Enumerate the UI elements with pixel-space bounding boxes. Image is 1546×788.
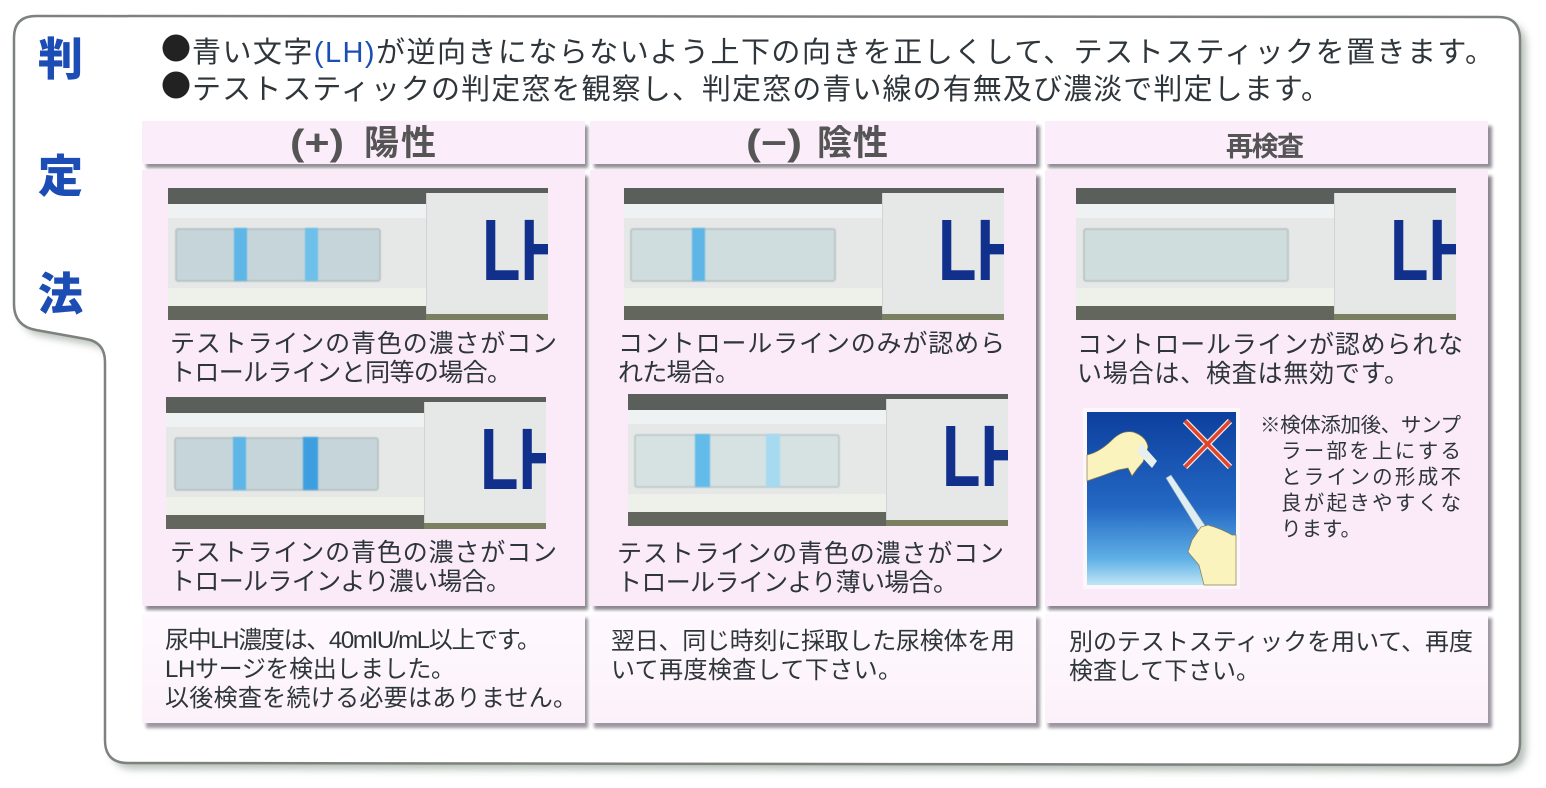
text block: instructions: 青い文字(LH)が逆向きにならないよう上下の向きを正しくして、テストスティックを置きます。 <box>192 36 1494 69</box>
note text: ります。 <box>1281 518 1361 541</box>
caption: positive equal: テストラインの青色の濃さがコン <box>170 330 557 358</box>
strip: no lines: LH <box>1390 202 1474 299</box>
text block: instructions <box>162 34 1494 106</box>
text block: instructions: テストスティックの判定窓を観察し、判定窓の青い線の有無及び濃淡で判定します。 <box>192 73 1330 106</box>
strip: positive darker: LH <box>480 411 564 508</box>
caption: negative lighter: トロールラインより薄い場合。 <box>617 569 958 597</box>
strip: negative control only <box>624 188 1022 320</box>
heading: negative: (−) <box>746 122 802 163</box>
footer text: positive: 以後検査を続ける必要はありません。 <box>165 685 577 712</box>
note text: とラインの形成不 <box>1281 466 1461 489</box>
title: vertical heading: 法 <box>38 269 83 320</box>
note text: 良が起きやすくな <box>1281 492 1461 515</box>
footer text: retest: 検査して下さい。 <box>1069 658 1260 685</box>
caption: invalid <box>1077 331 1463 388</box>
title: vertical heading <box>38 34 83 320</box>
footer text: negative: いて再度検査して下さい。 <box>611 657 902 684</box>
caption: positive darker: テストラインの青色の濃さがコン <box>170 539 557 567</box>
heading: negative: 陰性 <box>817 124 888 163</box>
footer text: retest: 別のテストスティックを用いて、再度 <box>1069 629 1473 656</box>
caption: invalid: コントロールラインが認められな <box>1077 331 1463 359</box>
heading: retest: 再検査 <box>1226 132 1304 162</box>
panel: positive column <box>142 121 588 728</box>
footer text: positive <box>165 627 577 712</box>
strip: positive darker <box>166 397 564 529</box>
note text: ※検体添加後、サンプ <box>1260 414 1462 437</box>
title: vertical heading: 判 <box>38 34 83 85</box>
strip: negative control only: LH <box>938 202 1022 299</box>
strip: no lines <box>1076 188 1474 320</box>
caption: negative control only: れた場合。 <box>618 359 740 387</box>
heading: positive: 陽性 <box>364 124 436 163</box>
caption: negative lighter <box>617 540 1004 597</box>
footer text: positive: LHサージを検出しました。 <box>165 656 455 683</box>
caption: positive equal: トロールラインと同等の場合。 <box>170 359 512 387</box>
heading: positive: (+) <box>290 122 344 163</box>
caption: negative control only: コントロールラインのみが認めら <box>618 330 1005 358</box>
strip: positive equal <box>168 188 566 320</box>
caption: invalid: い場合は、検査は無効です。 <box>1077 360 1409 388</box>
caption: positive darker: トロールラインより濃い場合。 <box>170 568 511 596</box>
caption: positive equal <box>170 330 557 387</box>
heading: negative <box>746 122 888 163</box>
caption: negative control only <box>618 330 1005 387</box>
icon: wrong handling illustration <box>1083 408 1240 589</box>
footer text: negative <box>611 628 1015 684</box>
strip: positive equal: LH <box>482 202 566 299</box>
caption: positive darker <box>170 539 557 596</box>
note text <box>1260 414 1462 541</box>
strip: negative lighter: LH <box>942 408 1026 505</box>
panel: negative column <box>590 121 1040 728</box>
caption: negative lighter: テストラインの青色の濃さがコン <box>617 540 1004 568</box>
panel: retest column <box>1045 121 1492 728</box>
footer text: retest <box>1069 629 1473 685</box>
note text: ラー部を上にする <box>1281 440 1461 463</box>
footer text: negative: 翌日、同じ時刻に採取した尿検体を用 <box>611 628 1015 655</box>
strip: negative lighter <box>628 394 1026 526</box>
footer text: positive: 尿中LH濃度は、40mIU/mL以上です。 <box>165 627 541 654</box>
heading: positive <box>290 122 436 163</box>
title: vertical heading: 定 <box>38 151 83 202</box>
